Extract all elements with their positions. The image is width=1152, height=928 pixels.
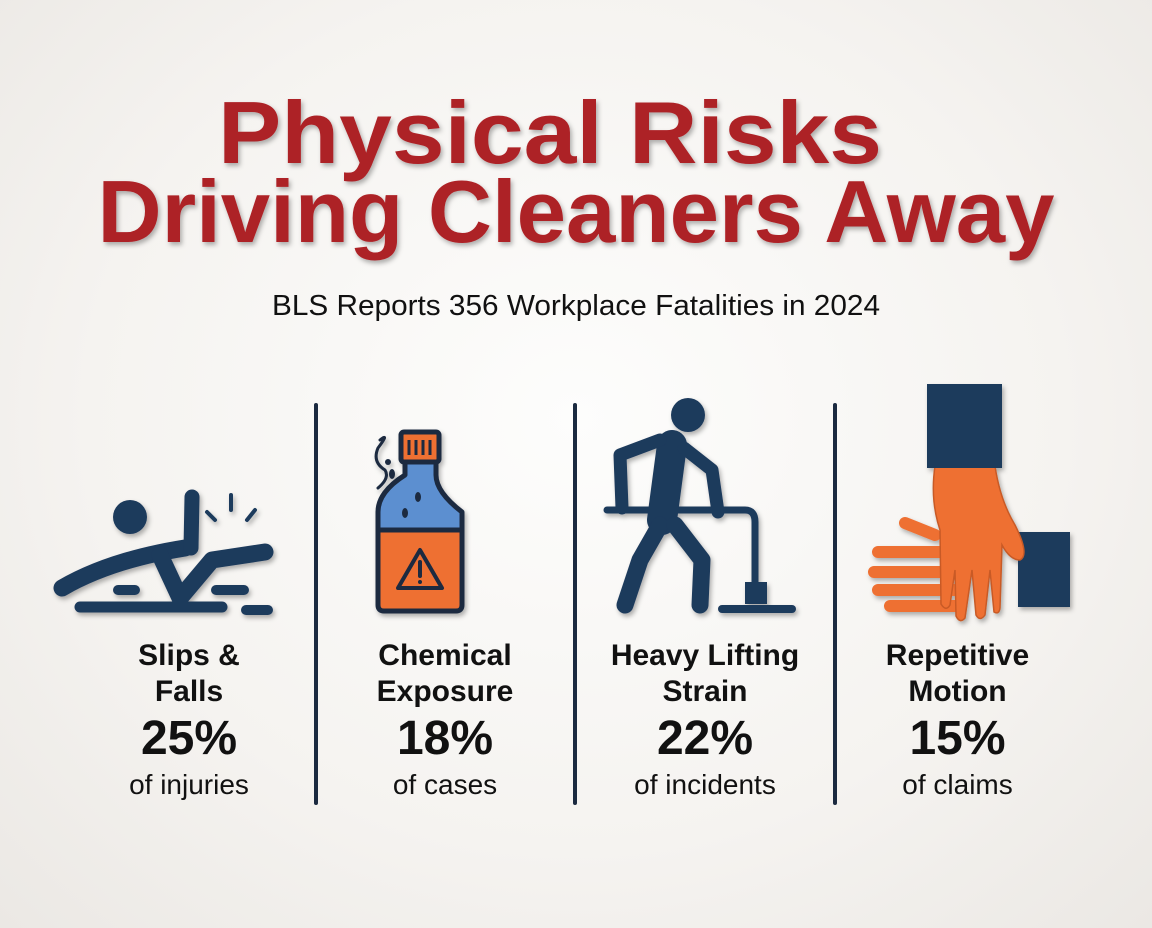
column 2 text: chemical exposure: of cases	[393, 769, 497, 800]
column 3 text: heavy lifting	[611, 639, 799, 800]
column 3 text: heavy lifting: Heavy Lifting	[611, 639, 799, 672]
column 2 text: chemical exposure: 18%	[397, 712, 493, 765]
icon: slip and fall	[62, 495, 268, 610]
column 3 text: heavy lifting: of incidents	[634, 769, 776, 800]
icon: heavy lifting	[607, 398, 792, 609]
column 1 text: slips & falls	[129, 639, 249, 800]
icon: repetitive motion hands	[874, 384, 1070, 621]
column 4 text: repetitive motion: Motion	[908, 675, 1007, 708]
column 2 text: chemical exposure: Exposure	[377, 675, 513, 708]
column 1 text: slips & falls: 25%	[141, 712, 237, 765]
column 1 text: slips & falls: Slips &	[138, 639, 240, 672]
column 4 text: repetitive motion	[886, 639, 1029, 800]
column 4 text: repetitive motion: of claims	[902, 769, 1013, 800]
column 1 text: slips & falls: of injuries	[129, 769, 249, 800]
title: Driving Cleaners Away	[98, 162, 1055, 261]
column 4 text: repetitive motion: Repetitive	[886, 639, 1029, 672]
column 1 text: slips & falls: Falls	[155, 675, 223, 708]
column 3 text: heavy lifting: 22%	[657, 712, 753, 765]
column 4 text: repetitive motion: 15%	[909, 712, 1006, 765]
column 2 text: chemical exposure	[377, 639, 513, 800]
column 2 text: chemical exposure: Chemical	[378, 639, 512, 672]
subtitle: BLS Reports 356 Workplace Fatalities in 2024	[272, 290, 880, 322]
column 3 text: heavy lifting: Strain	[662, 675, 748, 708]
title	[98, 83, 1055, 261]
title: Physical Risks	[218, 83, 882, 182]
icon: chemical bottle	[376, 432, 462, 611]
